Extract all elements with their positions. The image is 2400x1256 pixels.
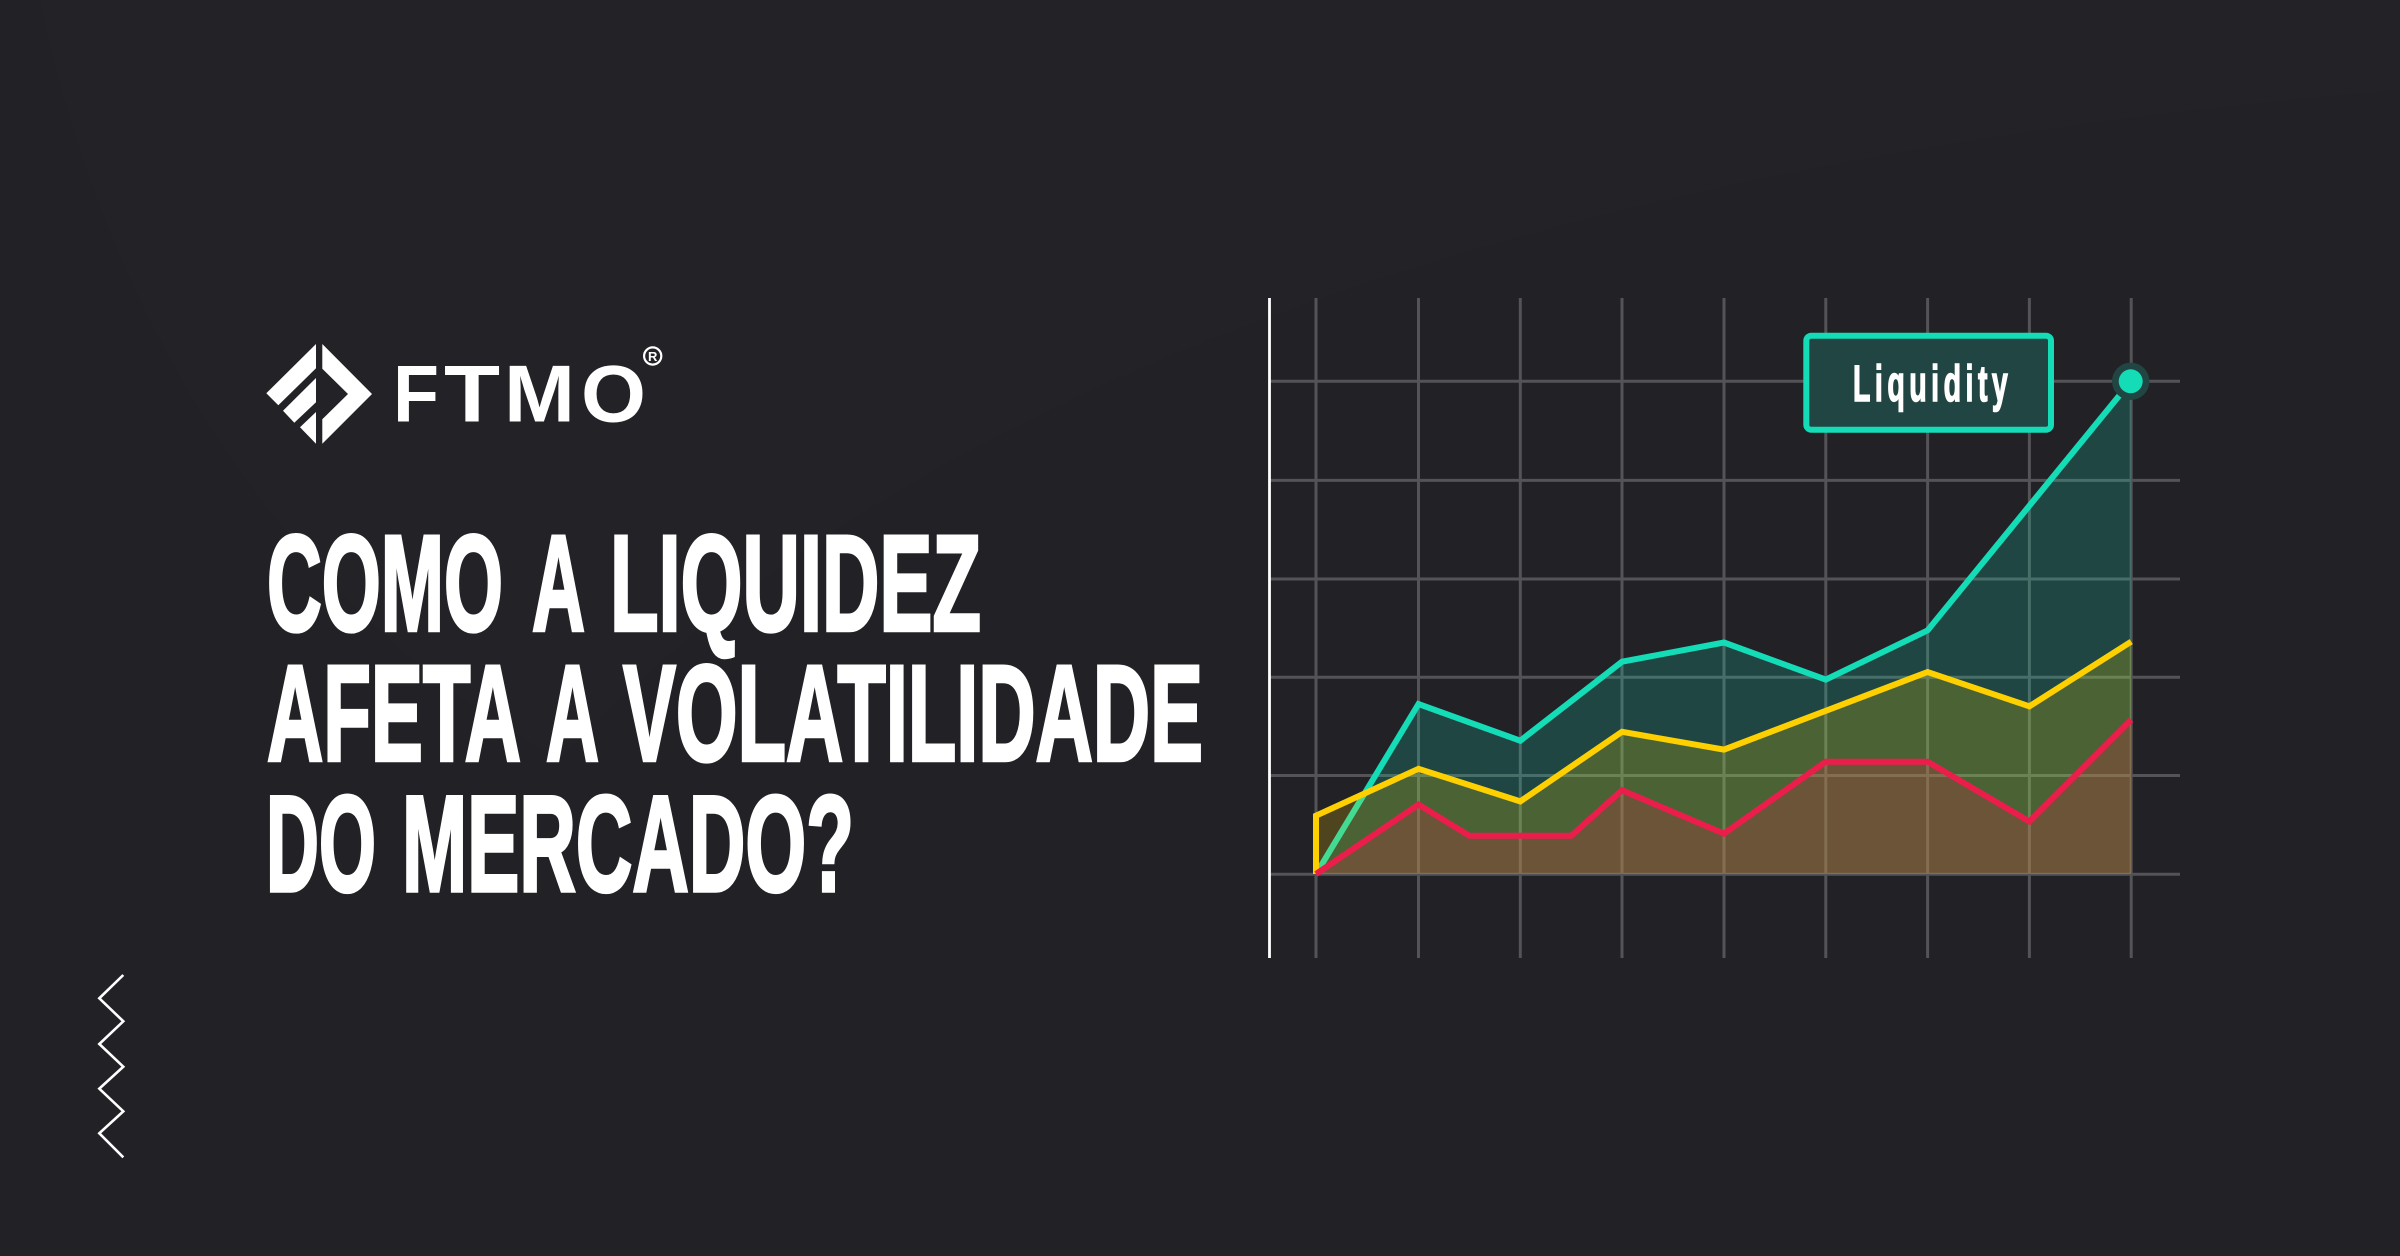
logo wordmark: O bbox=[581, 350, 646, 440]
area: yellow series bbox=[1316, 642, 2131, 874]
area: red series bbox=[1316, 720, 2131, 874]
logo wordmark bbox=[393, 350, 646, 440]
title: A bbox=[532, 508, 585, 660]
end point marker bbox=[2112, 363, 2149, 400]
registered mark: R bbox=[648, 349, 658, 364]
label: Liquidity bbox=[1806, 336, 2051, 430]
registered mark bbox=[644, 347, 661, 365]
logo wordmark: T bbox=[444, 350, 500, 440]
title: A bbox=[546, 638, 599, 790]
title: MERCADO? bbox=[402, 768, 854, 921]
line: teal series bbox=[1316, 381, 2131, 874]
title: LIQUIDEZ bbox=[610, 508, 981, 660]
y axis bbox=[1268, 298, 1271, 958]
title: VOLATILIDADE bbox=[623, 638, 1203, 790]
logo wordmark: F bbox=[393, 350, 439, 440]
chart grid bbox=[1270, 298, 2180, 958]
title: DO bbox=[266, 768, 376, 921]
line: red series bbox=[1316, 720, 2131, 874]
chart: liquidity line chart bbox=[1270, 298, 2180, 958]
title: COMO bbox=[267, 508, 503, 660]
label: Liquidity: Liquidity bbox=[1853, 355, 2012, 412]
logo wordmark: M bbox=[504, 350, 575, 440]
decorative zigzag icon bbox=[99, 975, 123, 1157]
icon: FTMO diamond mark bbox=[266, 344, 372, 444]
logo: FTMO bbox=[266, 344, 661, 444]
area: teal series bbox=[1316, 381, 2131, 874]
line: yellow series bbox=[1316, 642, 2131, 874]
title bbox=[266, 508, 1203, 921]
title: AFETA bbox=[267, 638, 521, 790]
